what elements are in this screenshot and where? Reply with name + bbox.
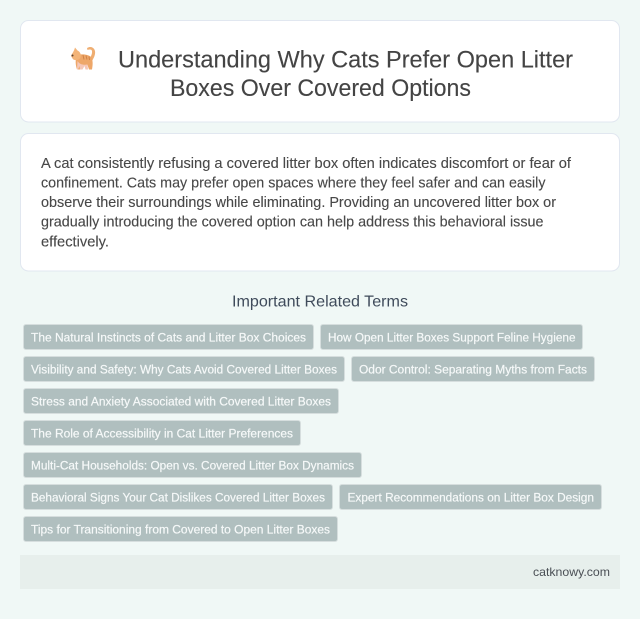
tag: [24, 420, 300, 446]
section heading: important related terms: Important Related Terms: [232, 294, 408, 310]
summary paragraph: [41, 156, 571, 250]
tag: Tips for Transitioning from Covered to Open Litter Boxes: [31, 522, 330, 536]
tag: [24, 356, 344, 382]
tag: Multi-Cat Households: Open vs. Covered Litter Box Dynamics: [31, 458, 354, 472]
icon: cat: [71, 47, 95, 70]
footer source: catknowy.com: [533, 565, 610, 579]
summary paragraph: observe their surroundings while eliminating. Providing an uncovered litter box or: [41, 195, 556, 211]
tag: [340, 484, 602, 510]
tag: [24, 388, 338, 414]
tag: The Natural Instincts of Cats and Litter Box Choices: [31, 330, 306, 344]
tag: Odor Control: Separating Myths from Facts: [359, 362, 587, 376]
tag: Stress and Anxiety Associated with Covered Litter Boxes: [31, 394, 331, 408]
title text: [118, 46, 573, 102]
panel: summary: [20, 134, 620, 271]
tag: Visibility and Safety: Why Cats Avoid Covered Litter Boxes: [31, 362, 337, 376]
tag: [352, 356, 594, 382]
tag: [24, 452, 362, 478]
title text: Boxes Over Covered Options: [170, 75, 471, 102]
tag: Expert Recommendations on Litter Box Design: [348, 490, 594, 504]
tag: How Open Litter Boxes Support Feline Hygiene: [328, 330, 576, 344]
footer bar: [20, 555, 620, 589]
tag: [24, 324, 314, 350]
summary paragraph: effectively.: [41, 234, 109, 250]
tag: [24, 484, 332, 510]
tag list: [24, 324, 602, 542]
tag: The Role of Accessibility in Cat Litter Preferences: [31, 426, 293, 440]
tag: [24, 516, 338, 542]
tag: Behavioral Signs Your Cat Dislikes Covered Litter Boxes: [31, 490, 325, 504]
summary paragraph: A cat consistently refusing a covered litter box often indicates discomfort or fear of: [41, 156, 571, 172]
summary paragraph: confinement. Cats may prefer open spaces where they feel safer and can easily: [41, 176, 546, 192]
tag: [320, 324, 582, 350]
title panel: [20, 20, 620, 122]
summary paragraph: gradually introducing the covered option can help address this behavioral issue: [41, 214, 544, 230]
title text: Understanding Why Cats Prefer Open Litter: [118, 46, 573, 74]
